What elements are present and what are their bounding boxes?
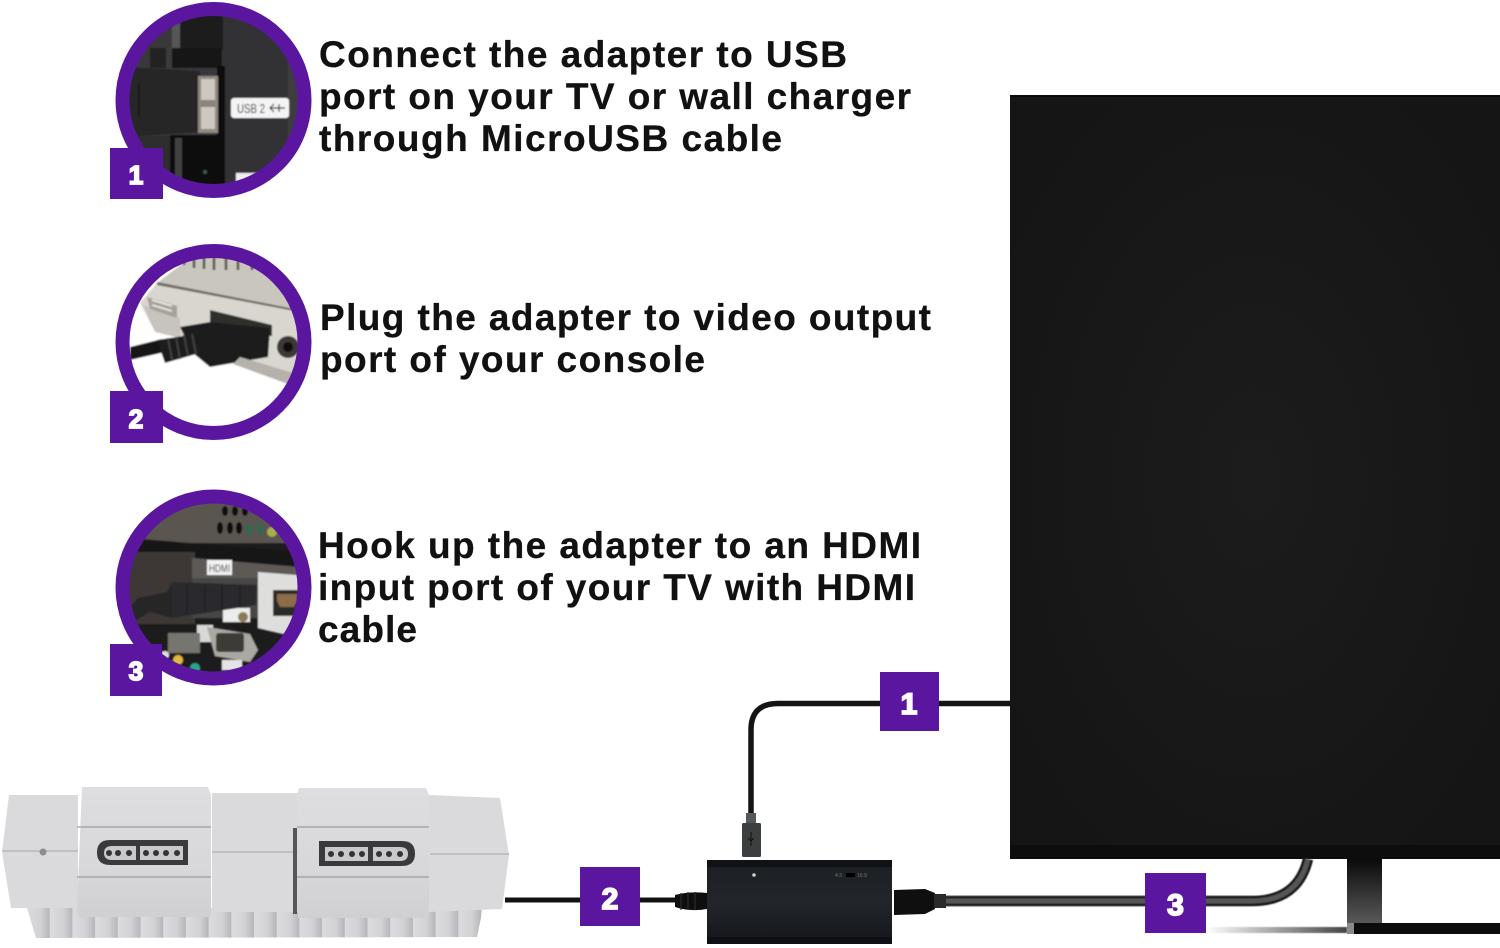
controller bay right <box>297 788 429 918</box>
cable 3: HDMI from adapter to TV <box>894 859 1308 915</box>
step 1: circular photo of USB port: USB 2 <box>237 101 265 116</box>
diagram badge 2: 2 <box>602 883 618 916</box>
HDMI adapter box: 16:9 <box>857 873 867 879</box>
step 2 instructions <box>320 297 931 380</box>
step 3 instructions: cable <box>318 609 417 650</box>
diagram badge 3: 3 <box>1167 889 1184 922</box>
badge: step 1: 1 <box>129 160 143 190</box>
step 1 instructions: through MicroUSB cable <box>319 118 782 159</box>
badge: step 2 <box>110 391 163 443</box>
HDMI adapter box <box>707 860 892 944</box>
diagram badge 2 <box>580 867 640 926</box>
step 3: circular photo of TV HDMI port: HDMI <box>209 563 230 575</box>
diagram badge 1 <box>880 672 939 731</box>
controller bay left <box>77 787 211 917</box>
step 1 instructions: Connect the adapter to USB <box>319 34 847 75</box>
console base ribs <box>27 908 483 938</box>
step 3 instructions: Hook up the adapter to an HDMI <box>318 525 921 566</box>
step 2 instructions: port of your console <box>320 339 705 380</box>
badge: step 2: 2 <box>129 404 143 434</box>
badge: step 3: 3 <box>129 656 143 686</box>
game console <box>2 787 509 938</box>
television <box>1010 95 1500 934</box>
cable 1: USB power from TV to adapter <box>742 704 1010 857</box>
step 3 instructions <box>318 525 921 650</box>
diagram badge 1: 1 <box>901 688 917 721</box>
step 2 instructions: Plug the adapter to video output <box>320 297 931 338</box>
step 3 instructions: input port of your TV with HDMI <box>318 567 915 608</box>
badge: step 3 <box>110 644 162 696</box>
step 3: circular photo of TV HDMI port <box>120 495 310 685</box>
cable 2: video from console to adapter <box>505 892 707 910</box>
step 1: circular photo of USB port <box>120 5 313 200</box>
badge: step 1 <box>110 148 163 199</box>
step 1 instructions <box>319 34 911 159</box>
HDMI adapter box: 4:3 <box>835 873 842 879</box>
step 1 instructions: port on your TV or wall charger <box>319 76 911 117</box>
console body <box>2 793 509 912</box>
step 2: circular photo of console video port <box>120 250 310 440</box>
diagram badge 3 <box>1145 873 1206 933</box>
